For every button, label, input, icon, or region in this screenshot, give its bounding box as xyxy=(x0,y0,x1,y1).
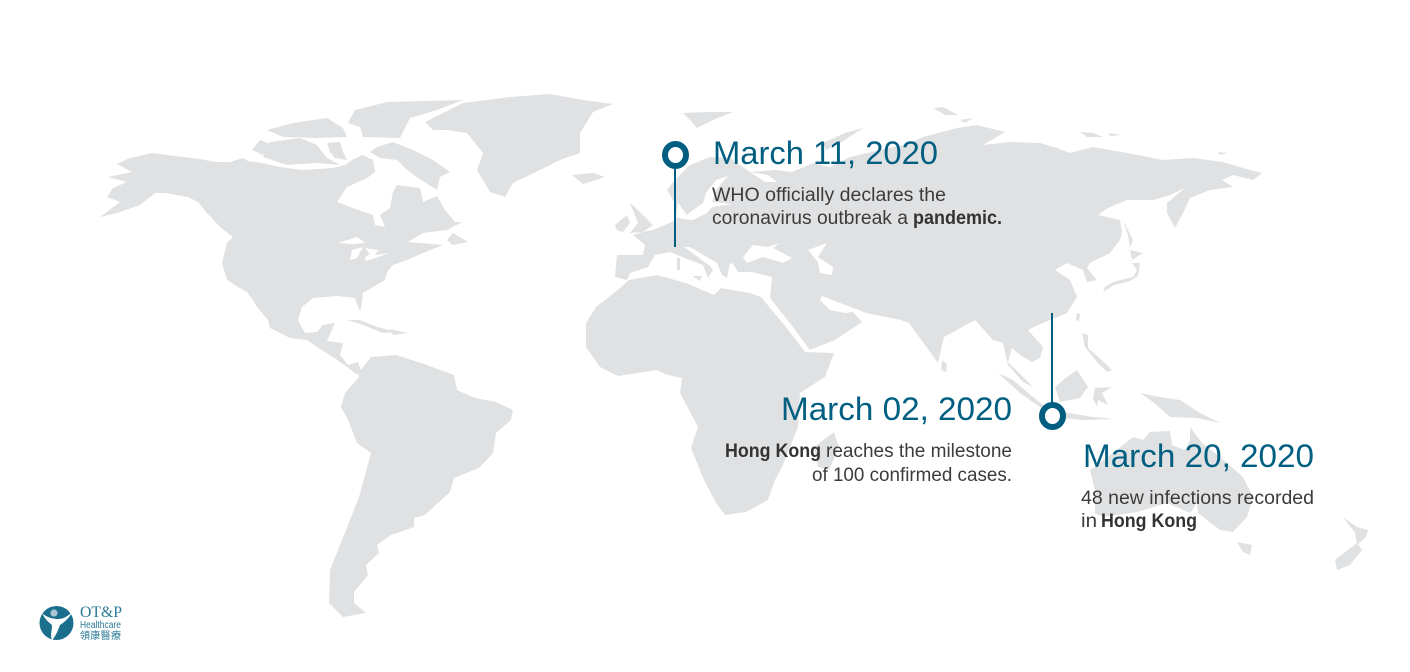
iceland xyxy=(572,173,605,184)
text: who declaration: pandemic. xyxy=(913,208,1002,229)
text: new infections: Hong Kong xyxy=(1101,511,1197,532)
logo wordmark xyxy=(80,604,122,642)
south america xyxy=(329,355,513,617)
banks island xyxy=(252,140,273,155)
africa xyxy=(586,275,834,515)
philippines xyxy=(1082,333,1112,372)
logo wordmark: OT&P xyxy=(80,604,122,621)
icon: figure in circle xyxy=(40,606,74,640)
text: hong kong milestone: reaches the milestone xyxy=(826,441,1012,462)
text: new infections: 48 new infections recorded xyxy=(1081,488,1314,509)
british isles xyxy=(630,203,653,233)
text: who declaration xyxy=(712,185,1002,229)
text: who declaration: WHO officially declares the xyxy=(712,185,946,206)
text: new infections xyxy=(1081,488,1314,532)
borneo xyxy=(1055,370,1088,402)
north and central america xyxy=(100,153,462,374)
text: hong kong milestone xyxy=(725,441,1012,486)
heading: march 11: March 11, 2020 xyxy=(713,135,938,171)
white sea cut-out xyxy=(750,172,777,182)
parry islands xyxy=(267,118,347,138)
arctic islands of eurasia xyxy=(683,112,733,128)
java and lesser sunda xyxy=(1048,411,1115,420)
logo wordmark: 領康醫療 xyxy=(80,629,121,642)
sumatra xyxy=(998,373,1047,408)
pin: hong kong xyxy=(1042,313,1063,427)
text: hong kong milestone: of 100 confirmed cases. xyxy=(812,465,1012,486)
newfoundland xyxy=(447,233,468,245)
callout: march 02 xyxy=(725,391,1012,486)
text: hong kong milestone: Hong Kong xyxy=(725,441,821,462)
gulf of california cut-out xyxy=(246,291,262,316)
text: who declaration: coronavirus outbreak a xyxy=(712,208,908,229)
logo wordmark: Healthcare xyxy=(80,620,121,631)
callout: march 11 xyxy=(665,135,1002,247)
lake superior cut-out xyxy=(338,237,365,244)
heading: march 02: March 02, 2020 xyxy=(781,391,1012,427)
heading: march 20: March 20, 2020 xyxy=(1083,438,1314,474)
taiwan xyxy=(1076,313,1080,322)
baffin island xyxy=(370,142,450,190)
callout: march 20 xyxy=(1042,313,1314,532)
australia xyxy=(1090,427,1253,532)
eurasia xyxy=(615,125,1262,387)
sulawesi xyxy=(1093,387,1112,407)
tasmania xyxy=(1237,542,1252,555)
ellesmere island xyxy=(348,100,463,138)
logo: ot&p healthcare xyxy=(40,604,122,642)
madagascar xyxy=(814,432,839,470)
mediterranean islands xyxy=(677,258,680,270)
sri lanka xyxy=(941,360,947,372)
pin: europe xyxy=(665,144,686,247)
text: new infections: in xyxy=(1081,511,1097,532)
world map xyxy=(100,94,1368,617)
victoria island xyxy=(263,138,340,165)
somerset island xyxy=(327,142,347,160)
japan and sakhalin xyxy=(1123,220,1133,248)
caspian sea cut-out xyxy=(808,243,833,275)
lake huron and erie cut-out xyxy=(365,248,390,261)
lake michigan cut-out xyxy=(350,247,363,260)
cuba and hispaniola xyxy=(347,320,397,333)
baltic sea cut-out xyxy=(676,176,732,220)
greenland xyxy=(425,94,613,197)
black sea cut-out xyxy=(743,243,792,263)
new zealand xyxy=(1343,517,1368,545)
new guinea xyxy=(1140,393,1220,423)
